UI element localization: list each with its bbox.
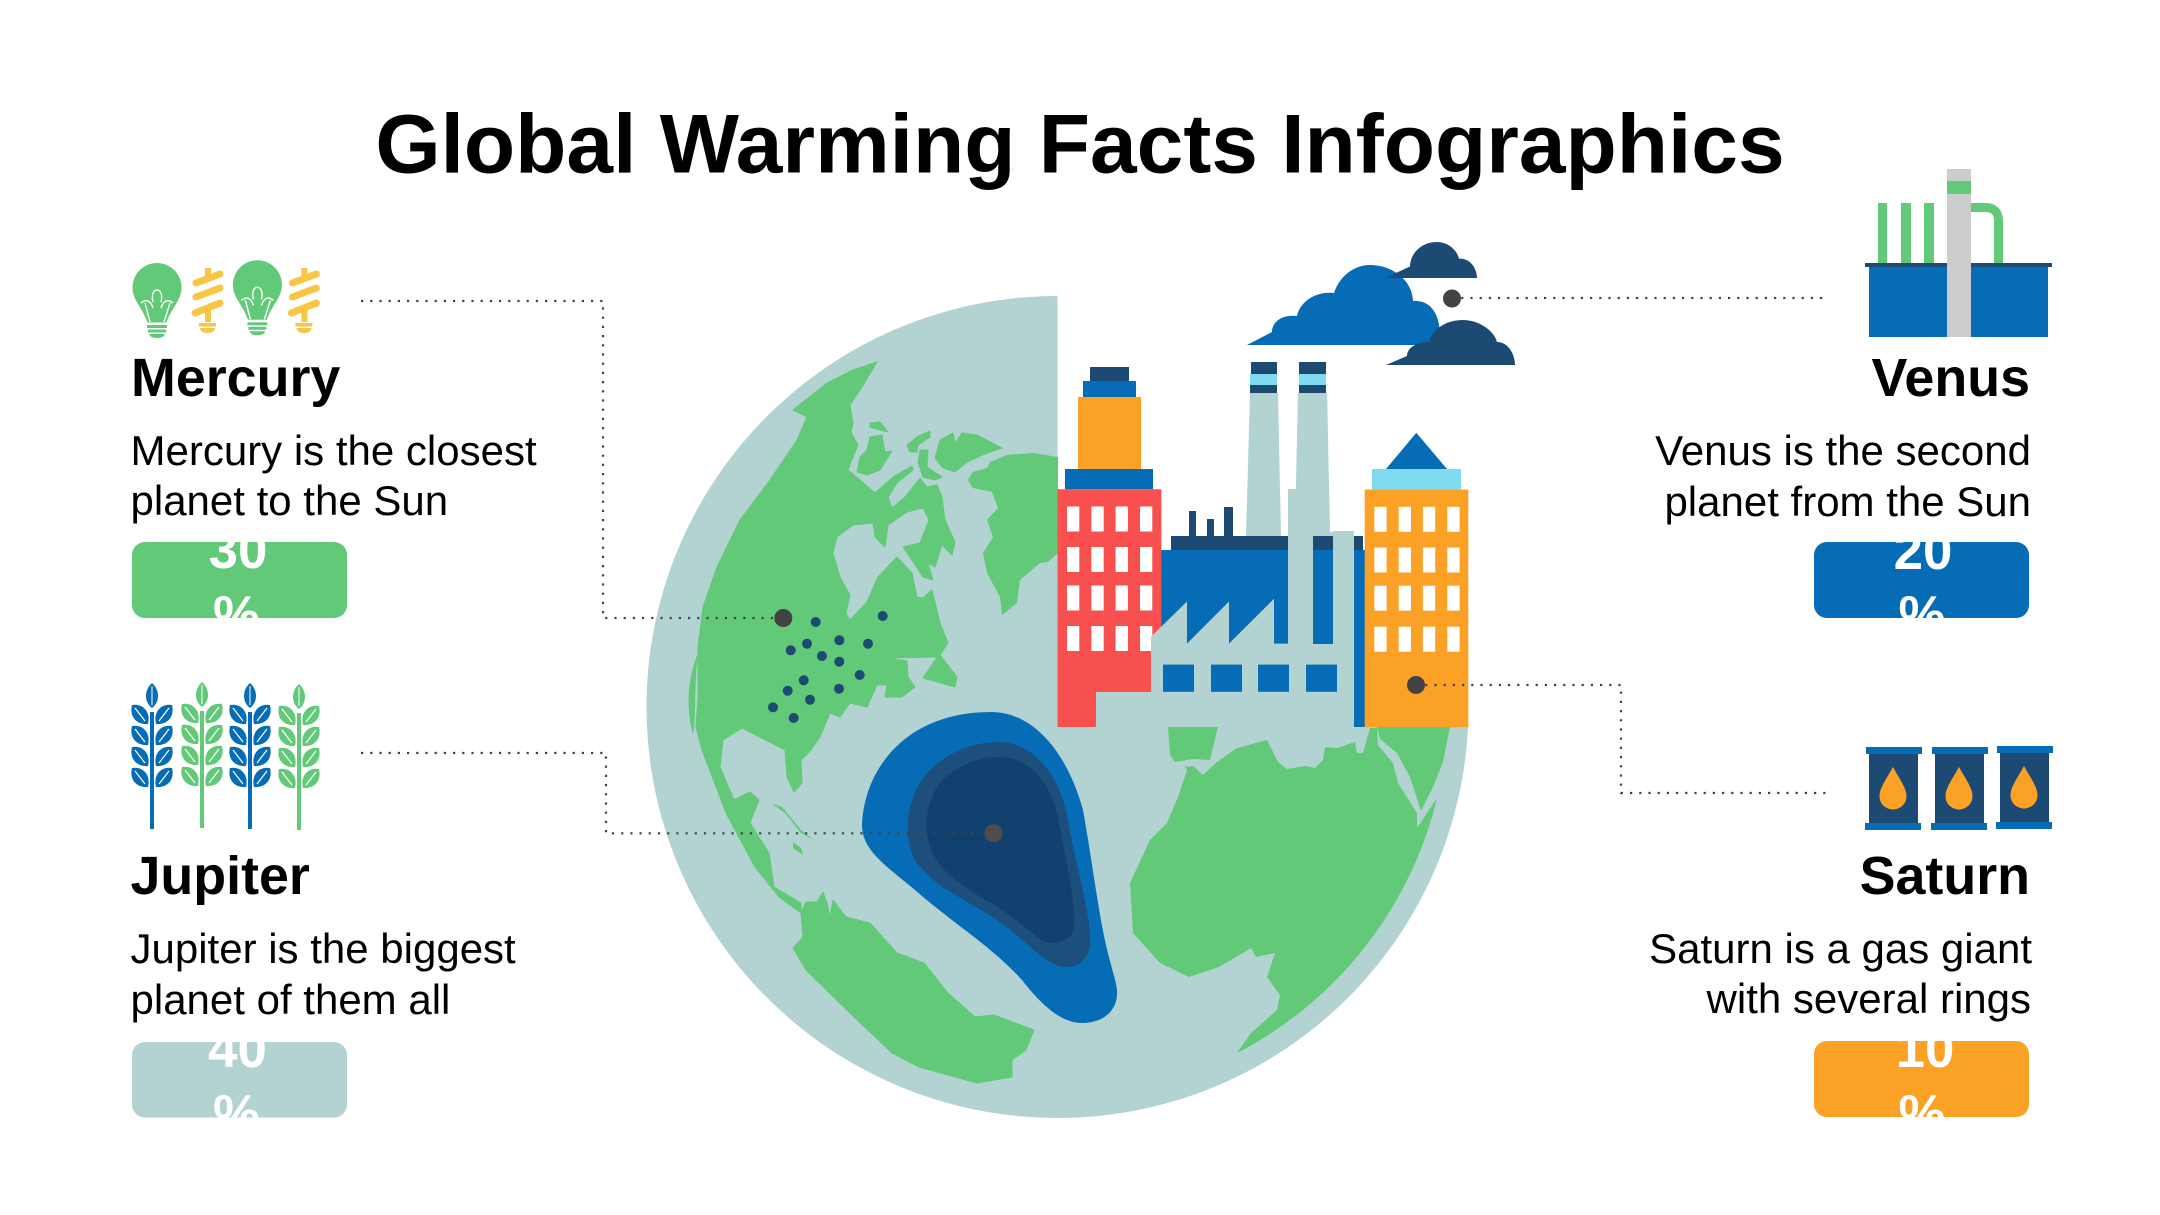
ocean blob outer — [862, 712, 1117, 1023]
continent: Africa top piece — [1168, 727, 1218, 762]
orange building — [1365, 433, 1468, 727]
heading: Saturn: Saturn — [1860, 846, 2030, 906]
continent: Greenland — [968, 453, 1058, 615]
clouds — [1247, 242, 1515, 365]
factory body — [1161, 507, 1365, 727]
heading: Venus: Venus — [1872, 348, 2030, 408]
heading: Jupiter: Jupiter — [130, 846, 310, 906]
city dots — [768, 611, 888, 723]
text: Mercury description: Mercury is the closest — [130, 427, 537, 474]
badge: 30%: 30 — [209, 521, 267, 580]
heading: Mercury: Mercury — [131, 348, 340, 408]
globe base — [646, 296, 1468, 1118]
text: Jupiter description: planet of them all — [130, 976, 450, 1023]
panel: Jupiter — [130, 682, 516, 1144]
connector: Venus — [1443, 290, 1827, 308]
icon: light bulbs — [132, 260, 316, 338]
text: Saturn description: with several rings — [1706, 975, 2031, 1022]
industrial city — [1058, 242, 1515, 727]
continent: Arctic islands — [857, 422, 1002, 480]
text: Saturn description: Saturn is a gas giant — [1649, 925, 2032, 972]
badge: 40%: % — [213, 1085, 260, 1144]
panel: Venus — [1655, 169, 2052, 645]
continent: Baja sliver — [689, 648, 700, 735]
continent: Caribbean islands — [771, 803, 814, 855]
badge: 40%: 40 — [208, 1020, 267, 1079]
continent: Africa — [1130, 728, 1437, 1053]
ocean blob inner — [926, 757, 1074, 943]
connector: Mercury — [361, 301, 792, 627]
continent: Asia wedge — [1377, 727, 1450, 811]
badge: 10% — [1814, 1020, 2029, 1144]
badge: 20% — [1814, 522, 2029, 645]
icon: oil barrels — [1865, 746, 2053, 830]
text: Mercury description: planet to the Sun — [130, 477, 448, 524]
continent: South America — [793, 892, 1034, 1083]
title: Global Warming Facts Infographics — [375, 96, 1785, 190]
badge: 10%: 10 — [1896, 1020, 1954, 1079]
text: Venus description: planet from the Sun — [1664, 478, 2031, 525]
red building — [1058, 367, 1161, 727]
connector: Saturn — [1407, 676, 1827, 793]
connector: Jupiter — [361, 753, 1003, 842]
panel: Saturn — [1649, 746, 2053, 1144]
badge: 40% — [132, 1020, 347, 1144]
icon: wheat — [131, 682, 320, 830]
badge: 30% — [132, 521, 347, 645]
continent: North America — [696, 362, 957, 913]
icon: refinery tank — [1865, 169, 2052, 337]
ocean blob middle — [908, 742, 1090, 967]
text: Jupiter description: Jupiter is the biggest — [130, 925, 516, 972]
chimney stacks — [1246, 362, 1330, 536]
badge: 20%: % — [1899, 586, 1945, 645]
globe illustration — [646, 296, 1468, 1118]
text: Venus description: Venus is the second — [1655, 427, 2031, 474]
factory saw-tooth base — [1096, 393, 1354, 727]
badge: 10%: % — [1899, 1085, 1945, 1144]
badge: 30%: % — [213, 586, 260, 645]
panel: Mercury — [130, 260, 537, 645]
badge: 20%: 20 — [1894, 522, 1952, 581]
